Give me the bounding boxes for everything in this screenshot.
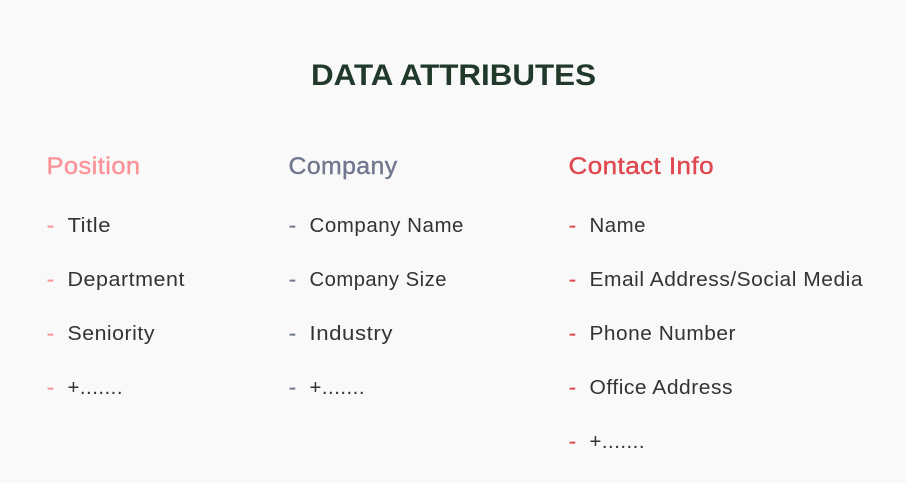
list item: name: Name <box>590 215 646 237</box>
list item: department <box>47 266 185 292</box>
list item: more <box>569 428 645 454</box>
panel: contact info <box>568 153 863 454</box>
list item: company size: - <box>289 266 296 292</box>
list item: more: +....... <box>590 431 645 453</box>
list item: seniority <box>47 320 155 346</box>
list item: company name: - <box>289 212 296 238</box>
list item: more: - <box>569 428 576 454</box>
list item: seniority: Seniority <box>68 323 155 345</box>
list item: phone number: - <box>569 320 576 346</box>
list item: company name: Company Name <box>310 215 464 237</box>
list item: department: - <box>47 266 54 292</box>
panel: position <box>46 153 185 400</box>
heading: position: Position <box>46 153 140 180</box>
list item: more: - <box>289 374 296 400</box>
list item: name: - <box>569 212 576 238</box>
title: DATA ATTRIBUTES <box>311 59 596 92</box>
heading: company: Company <box>288 153 398 180</box>
list item: industry: - <box>289 320 296 346</box>
list item: phone number: Phone Number <box>590 323 736 345</box>
heading: contact info: Contact Info <box>568 153 714 180</box>
list item: industry <box>289 320 393 346</box>
list item: title: - <box>47 212 54 238</box>
list item: name <box>569 212 646 238</box>
list item: title: Title <box>68 215 111 237</box>
panel: company <box>288 153 464 400</box>
list item: more <box>289 374 365 400</box>
list item: company size: Company Size <box>310 269 447 291</box>
list item: seniority: - <box>47 320 54 346</box>
list item: email address and social media: Email Address/Social Media <box>590 269 863 291</box>
list item: industry: Industry <box>310 323 393 345</box>
list item: office address: - <box>569 374 576 400</box>
list item: more: +....... <box>310 377 365 399</box>
list item: more <box>47 374 123 400</box>
list item: title <box>47 212 111 238</box>
list item: more: +....... <box>68 377 123 399</box>
list item: email address and social media: - <box>569 266 576 292</box>
list item: department: Department <box>68 269 185 291</box>
list item: more: - <box>47 374 54 400</box>
list item: office address: Office Address <box>590 377 733 399</box>
